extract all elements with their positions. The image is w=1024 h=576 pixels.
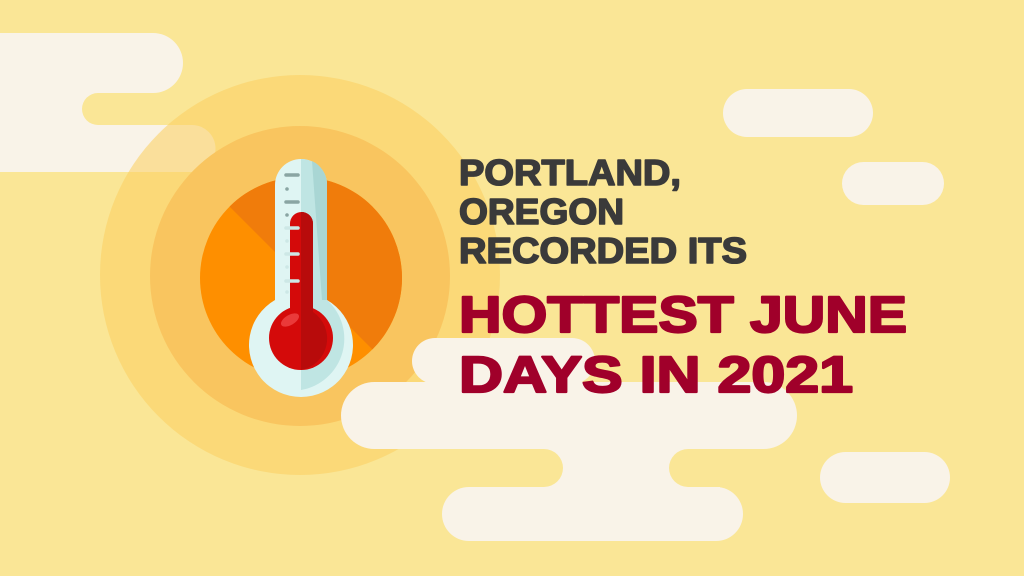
heading: red highlight: HOTTEST JUNE: [459, 286, 907, 343]
cloud: right bottom: [820, 452, 950, 503]
heading: red highlight: [459, 286, 907, 403]
cloud: right top: [723, 89, 873, 137]
heading: dark lines: OREGON: [459, 191, 624, 232]
cloud: top-left: [0, 33, 216, 172]
cloud: bottom center: [341, 338, 799, 541]
heading: dark lines: PORTLAND,: [459, 152, 681, 193]
icon: thermometer: [249, 159, 353, 397]
heading: red highlight: DAYS IN 2021: [459, 346, 853, 403]
heading: dark lines: RECORDED ITS: [459, 230, 747, 271]
heading: dark lines: [459, 152, 747, 271]
sun: [100, 75, 500, 475]
cloud: right middle: [842, 162, 944, 205]
